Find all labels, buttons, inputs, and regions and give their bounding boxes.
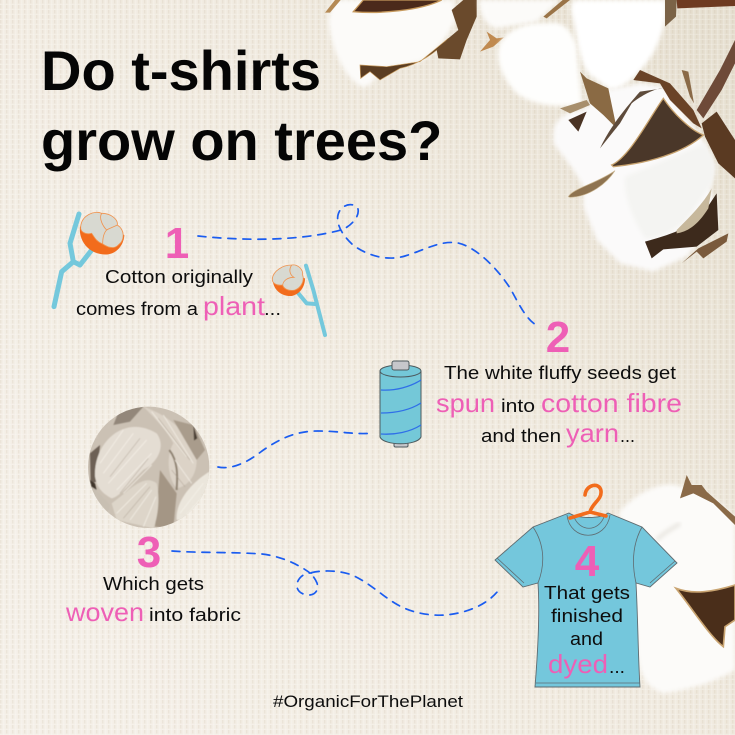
- step 4: [495, 485, 677, 687]
- connector: step 1 to step 2: [198, 205, 536, 325]
- connector: step 3 to t-shirt: [172, 551, 501, 615]
- step number 3: 3: [137, 528, 161, 577]
- step 4 text: dyed: [548, 649, 608, 679]
- step 2 text: spun: [436, 388, 495, 418]
- step 2 text: The white fluffy seeds get: [444, 362, 676, 383]
- cotton boll top middle: [479, 0, 735, 106]
- step number 2: 2: [546, 313, 570, 362]
- step 4 text: finished: [551, 605, 623, 626]
- photo: yarn skeins: [87, 406, 210, 529]
- title: [41, 39, 442, 172]
- step 2 text: cotton fibre: [541, 388, 682, 418]
- t-shirt: [495, 513, 677, 687]
- step 1 text: plant: [203, 291, 266, 321]
- cotton boll top left: [325, 0, 477, 87]
- title: grow on trees?: [41, 109, 442, 172]
- step 4 text: ...: [609, 656, 625, 677]
- hanger: [570, 485, 606, 518]
- photo: cotton boll bottom right: [618, 475, 735, 693]
- step 4 text: and: [570, 628, 603, 649]
- title: Do t-shirts: [41, 39, 321, 102]
- icon: thread spool: [380, 361, 421, 447]
- step 1: [54, 212, 325, 335]
- icon: cotton plant small: [272, 265, 325, 335]
- connector: yarn to spool: [218, 431, 374, 468]
- photo: cotton bolls top right: [325, 0, 735, 272]
- step 3 text: into fabric: [149, 604, 241, 625]
- step 3 text: woven: [65, 597, 144, 627]
- step 3 text: Which gets: [103, 573, 204, 594]
- step 3 text: [65, 573, 241, 627]
- step number 4: 4: [575, 537, 600, 586]
- step 2 text: yarn: [566, 418, 619, 448]
- step 4 text: [544, 582, 630, 679]
- step 4 text: That gets: [544, 582, 630, 603]
- icon: cotton plant large: [54, 212, 124, 307]
- step 1 text: ...: [264, 298, 281, 319]
- step 2 text: [436, 362, 682, 448]
- cotton boll right: [553, 40, 735, 272]
- step 3: [65, 528, 241, 627]
- hashtag: #OrganicForThePlanet: [273, 692, 463, 711]
- step 1 text: [76, 266, 281, 321]
- step 1 text: comes from a: [76, 298, 199, 319]
- icon: t-shirt on hanger: [495, 485, 677, 687]
- step number 1: 1: [165, 219, 189, 268]
- step 2 text: ...: [620, 425, 635, 446]
- step 2 text: into: [501, 395, 535, 416]
- step 2: [380, 313, 682, 448]
- step 2 text: and then: [481, 425, 561, 446]
- step 1 text: Cotton originally: [105, 266, 254, 287]
